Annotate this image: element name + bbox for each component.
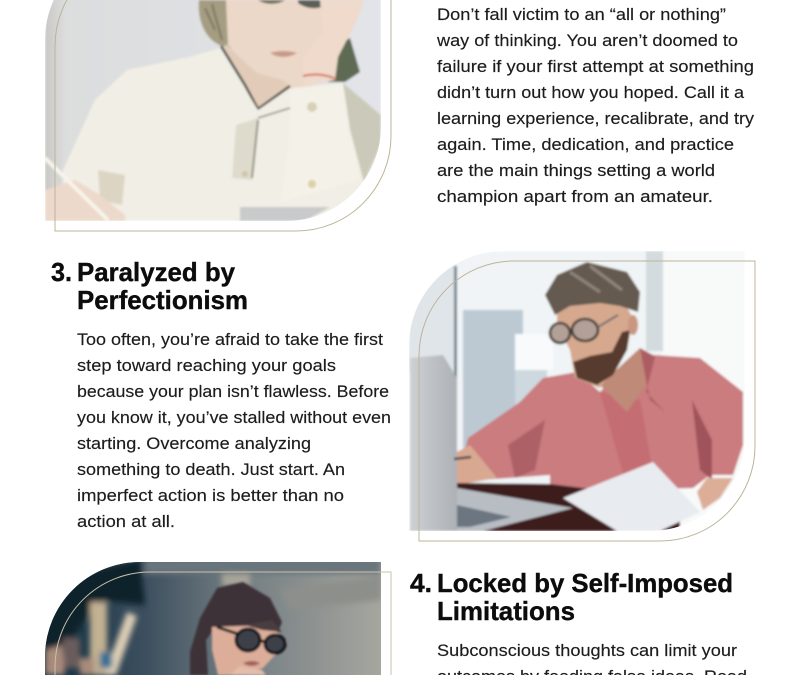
thin gold frame around second photo [419, 261, 755, 541]
text block: all or nothing thinking: are the main things setting a world [437, 161, 715, 180]
thin gold frame around third photo [55, 572, 391, 675]
text block: all or nothing thinking: failure if your first attempt at something [437, 57, 754, 76]
text block: perfectionism: you know it, you’ve stalled without even [77, 408, 391, 427]
photo: stressed man with hand on face [45, 0, 381, 221]
text block: all or nothing thinking: champion apart from an amateur. [437, 187, 713, 206]
text block: all or nothing thinking: learning experience, recalibrate, and try [437, 109, 755, 128]
text block: perfectionism: something to death. Just start. An [77, 460, 345, 479]
heading: 3. Paralyzed by Perfectionism: 3. [51, 257, 72, 287]
text block: perfectionism: starting. Overcome analyzing [77, 434, 311, 453]
text block: all or nothing thinking: way of thinking. You aren’t doomed to [436, 31, 738, 50]
text block: subconscious limits [437, 641, 747, 675]
heading: 4. Locked by Self-Imposed Limitations [410, 568, 733, 626]
heading: 3. Paralyzed by Perfectionism: Paralyzed by [77, 257, 236, 287]
heading: 4. Locked by Self-Imposed Limitations: Locked by Self-Imposed [437, 568, 733, 598]
text block: perfectionism [77, 330, 391, 531]
text block: perfectionism: step toward reaching your goals [77, 356, 336, 375]
photo: woman with glasses frowning [45, 558, 381, 675]
text block: perfectionism: because your plan isn’t flawless. Before [77, 382, 389, 401]
heading: 4. Locked by Self-Imposed Limitations: 4. [410, 568, 432, 598]
text block: all or nothing thinking: Don’t fall victim to an “all or nothing” [437, 5, 726, 24]
text block: perfectionism: action at all. [77, 512, 175, 531]
heading: 4. Locked by Self-Imposed Limitations: Limitations [437, 596, 575, 626]
text block: subconscious limits: Subconscious thoughts can limit your [437, 641, 737, 660]
thin gold frame around first photo [55, 0, 391, 231]
photo: bearded man at laptop [409, 251, 745, 531]
text block: perfectionism: Too often, you’re afraid to take the first [77, 330, 383, 349]
text block: all or nothing thinking: again. Time, dedication, and practice [437, 135, 734, 154]
text block: perfectionism: imperfect action is better than no [77, 486, 344, 505]
text block: all or nothing thinking [436, 5, 755, 206]
heading: 3. Paralyzed by Perfectionism [51, 257, 248, 315]
heading: 3. Paralyzed by Perfectionism: Perfectionism [77, 285, 248, 315]
text block: all or nothing thinking: didn’t turn out how you hoped. Call it a [437, 83, 745, 102]
